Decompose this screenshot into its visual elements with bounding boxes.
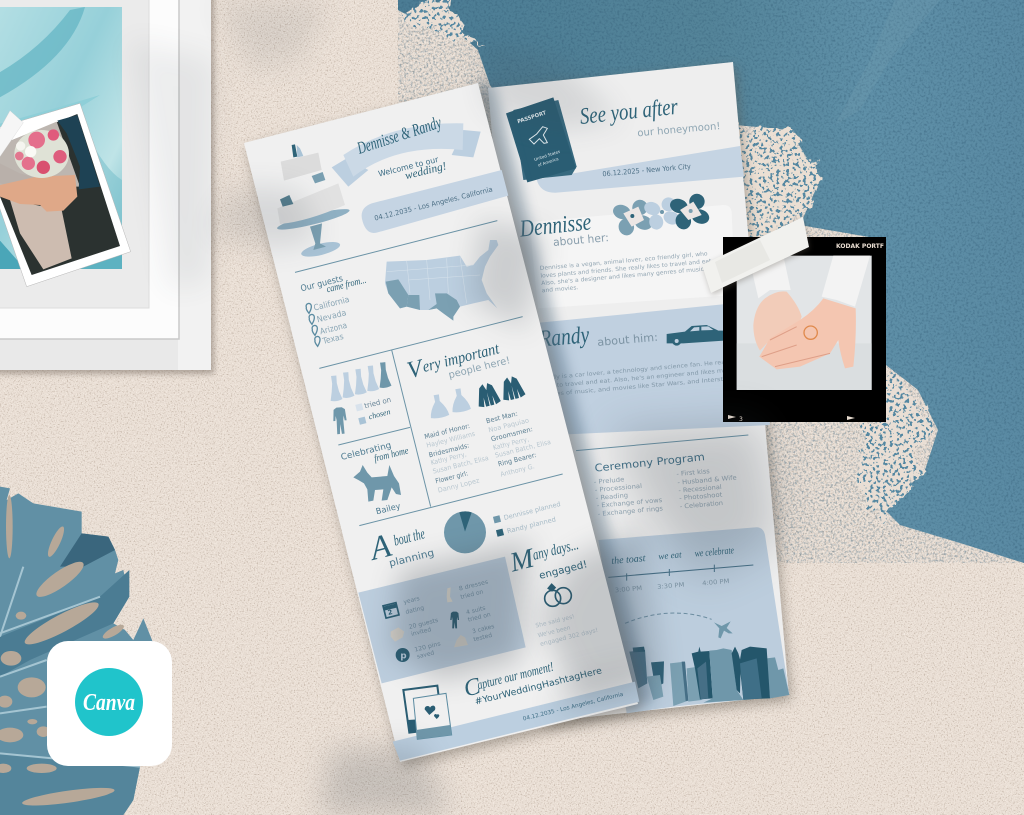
- plant shadow overlay: [130, 0, 780, 815]
- icon: pinterest: [396, 648, 410, 662]
- heading: celebrating: [340, 441, 410, 465]
- panel: planning stats: [358, 557, 526, 683]
- paragraph: about her: [540, 251, 714, 294]
- date band: 06.12.2025 - New York City: [602, 163, 691, 178]
- heading: very important: V: [404, 355, 427, 384]
- skyline: [629, 647, 789, 706]
- left card: wedding infographic: [244, 83, 643, 767]
- list: ceremony part 1: - Processional: [595, 483, 643, 494]
- panel: planning stats: 4 suits: [465, 605, 486, 616]
- panel: planning stats: 20 guests: [408, 617, 439, 631]
- list: bridal party right: Noa Paquiao: [488, 416, 530, 434]
- list: ceremony part 1: - Exchange of rings: [598, 505, 663, 518]
- inner mat: [0, 0, 149, 308]
- heading: about the planning: bout the: [392, 525, 427, 550]
- list: ceremony part 1: [594, 476, 663, 518]
- heading: very important: [404, 340, 512, 384]
- icon: passport: of America: [537, 156, 560, 168]
- timeline: 3:30 PM: [657, 582, 685, 591]
- heading: Dennisse about her: about her:: [552, 231, 609, 249]
- paint speckles top left: [405, 0, 480, 48]
- divider: [576, 435, 748, 451]
- list: bridal party left: Flower girl:: [435, 469, 469, 485]
- timeline: 3:00 PM: [615, 585, 642, 594]
- list: guest origins: Arizona: [319, 320, 348, 336]
- icon: suit: [450, 612, 459, 628]
- paragraph: about her: Also, she's a designer and likes many genres of music: [541, 267, 704, 287]
- paragraph: about her: and movies.: [542, 285, 579, 294]
- heading: see you after: [579, 94, 721, 139]
- icon: wedding cake: [276, 144, 351, 260]
- logo circle: [75, 668, 143, 736]
- divider: [338, 427, 410, 445]
- paragraph: about him: likes to travel and eat. Also, he's an engineer and likes many: [540, 367, 736, 390]
- date pill: [362, 170, 508, 233]
- timeline: 4:00 PM: [702, 578, 730, 587]
- timeline: we celebrate: [694, 545, 735, 560]
- panel: planning stats: years: [403, 595, 420, 606]
- logo wordmark: Canva: [83, 690, 135, 716]
- timeline: the toast: [611, 553, 646, 567]
- instant film photo: [723, 237, 886, 423]
- pie legend: Randy planned: [506, 515, 557, 535]
- frame moulding: [0, 0, 211, 370]
- list: ceremony part 2: [676, 468, 737, 511]
- list: ceremony part 2: - First kiss: [676, 468, 710, 478]
- banner: couple names: Dennisse & Randy: [354, 113, 444, 158]
- paragraph: about her: Dennisse is a vegan, animal lover, eco friendly girl, who: [540, 251, 708, 272]
- film marks: [728, 415, 855, 423]
- heading: very important: people here!: [447, 355, 512, 381]
- heading: many days engaged: any days...: [531, 536, 580, 564]
- panel: planning stats: invited: [410, 626, 432, 638]
- list: guest origins: [300, 274, 368, 346]
- groom suit and key: chosen: [368, 407, 391, 421]
- icon: car: [667, 325, 733, 346]
- tape piece: [0, 111, 23, 157]
- list: bridal party right: Ring Bearer:: [497, 451, 537, 468]
- panel: planning stats: 120 pins: [414, 640, 441, 654]
- divider: [319, 317, 523, 368]
- date band: [537, 146, 744, 193]
- heading: about the planning: planning: [388, 548, 435, 570]
- gowns and jackets: [427, 374, 526, 419]
- monstera leaf: [0, 487, 167, 815]
- paragraph: about him: genres of music, and movies like Star Wars, and Interstellar: [541, 375, 739, 399]
- heading: celebrating: from home: [373, 445, 410, 465]
- list: bridal party right: Susan Batch, Elisa: [494, 438, 552, 460]
- heading: Randy about him: Randy: [537, 322, 591, 353]
- about him band: [540, 302, 770, 435]
- heading: Dennisse about her: Dennisse: [518, 209, 593, 243]
- paragraph: about her: loves plants and friends. She really likes to travel and eat.: [540, 259, 714, 280]
- photo: couple with bouquet: [0, 114, 120, 275]
- leaf holes: [0, 495, 126, 809]
- picture frame: [0, 0, 214, 374]
- list: ceremony part 2: - Recessional: [678, 484, 722, 495]
- list: guest origins: Our guests: [300, 274, 345, 294]
- list: bridal party left: Maid of Honor:: [424, 422, 471, 441]
- list: bridal party left: Kathy Perry,: [430, 450, 467, 467]
- heading: many days engaged: M: [506, 542, 539, 578]
- list: ceremony part 1: - Reading: [596, 492, 628, 502]
- heading: about the planning: A: [364, 527, 395, 568]
- bottom band: 04.12.2035 - Los Angeles, California: [522, 692, 624, 723]
- list: guest origins: Nevada: [316, 307, 347, 324]
- icon: dog: [353, 465, 401, 502]
- text: capture moment and hashtag: C: [461, 673, 484, 702]
- film label: KODAK PORTF: [836, 242, 884, 250]
- heading: celebrating: Celebrating: [340, 441, 393, 463]
- text: capture moment and hashtag: apture our moment!: [475, 659, 555, 692]
- heading: Randy about him: about him:: [597, 331, 658, 349]
- icon: passport: [506, 97, 577, 182]
- pie legend: [493, 500, 561, 537]
- icon: guests heart: [391, 627, 404, 642]
- divider: [359, 474, 563, 526]
- list: bridal party right: Kathy Perry,: [492, 435, 530, 452]
- text: capture moment and hashtag: #YourWeddingHashtagHere: [474, 666, 604, 708]
- text: Bailey: Bailey: [375, 501, 401, 516]
- heading: about the planning: [364, 525, 435, 570]
- list: bridal party left: Danny Lopez: [437, 476, 481, 495]
- pie legend: Dennisse planned: [503, 500, 561, 522]
- blue paint brush stroke: [398, 0, 1024, 563]
- badge: Canva app icon: [47, 641, 172, 766]
- icon: pinterest: p: [400, 651, 407, 661]
- list: guest origins: California: [312, 294, 350, 313]
- list: guest origins: Texas: [320, 331, 345, 346]
- icon: airplane: [714, 621, 733, 638]
- icon: calendar: [383, 603, 399, 618]
- panel: planning stats: 8 dresses: [458, 579, 489, 593]
- icon: cake: [454, 635, 468, 647]
- text: engaged days: She said yes!: [535, 613, 575, 630]
- list: bridal party right: Groomsmen:: [490, 425, 534, 443]
- marble art print: [0, 7, 122, 269]
- heading: Randy about him: [537, 322, 658, 353]
- timeline: we eat: [658, 549, 682, 561]
- list: ceremony part 1: - Prelude: [594, 476, 625, 486]
- tilted photo print: [0, 103, 131, 287]
- list: ceremony part 2: - Husband & Wife: [677, 475, 737, 487]
- icon: flowers: [609, 190, 713, 238]
- bridesmaid dresses: [328, 362, 392, 402]
- heading: many days engaged: engaged!: [538, 559, 589, 582]
- paragraph: about him: [540, 359, 739, 399]
- list: ceremony part 2: - Photoshoot: [679, 492, 723, 502]
- icon: passport: United States: [533, 149, 561, 162]
- icon: passport: PASSPORT: [517, 110, 547, 125]
- icon: photo frames: [403, 686, 452, 739]
- pie chart: [444, 511, 486, 553]
- right card: honeymoon page: [488, 62, 791, 727]
- panel: planning stats: tried on: [467, 611, 492, 624]
- flight path: [625, 613, 712, 623]
- text: welcome: wedding!: [404, 160, 448, 182]
- date pill: 04.12.2035 - Los Angeles, California: [374, 185, 494, 223]
- list: bridal party left: Hayley Williams: [426, 430, 476, 450]
- panel: timeline and skyline: [598, 527, 789, 713]
- icon: calendar: 2: [387, 608, 394, 617]
- paint speckles lower: [858, 362, 935, 525]
- banner: couple names: [332, 113, 481, 187]
- text: engaged days: We've been: [537, 624, 571, 639]
- list: bridal party left: [424, 422, 489, 495]
- list: ceremony part 1: - Exchange of vows: [597, 497, 663, 510]
- film marks: 3: [739, 416, 743, 423]
- list: bridal party left: Bridesmaids:: [428, 441, 470, 459]
- heading: very important: ery important: [421, 340, 501, 376]
- panel: planning stats: dating: [405, 604, 425, 616]
- icon: dress: [447, 587, 453, 602]
- paragraph: about him: Randy is a car lover, a technology and science fan. He really: [540, 359, 733, 382]
- heading: many days engaged: [506, 536, 589, 582]
- paint speckles upper: [735, 128, 822, 260]
- panel: planning stats: tried on: [460, 588, 484, 601]
- panel: planning stats: saved: [416, 649, 435, 661]
- heading: ceremony program: Ceremony Program: [594, 451, 705, 475]
- bottom band: [393, 682, 639, 761]
- US map: [385, 240, 498, 321]
- icon: rings: [545, 584, 571, 606]
- heading: see you after: our honeymoon!: [637, 121, 721, 139]
- timeline: [608, 545, 753, 594]
- vertical divider: [392, 350, 431, 507]
- list: bridal party left: Susan Batch, Elisa: [432, 454, 489, 476]
- about her panel: [530, 205, 735, 308]
- list: bridal party right: Anthony G.: [500, 462, 535, 479]
- heading: see you after: See you after: [579, 94, 680, 130]
- panel: planning stats: tested: [473, 632, 493, 643]
- groom suit and key: tried on: [363, 395, 392, 410]
- list: guest origins: came from...: [325, 275, 368, 295]
- panel: planning stats: 3 cakes: [471, 623, 495, 635]
- divider: [295, 221, 497, 272]
- photo: hands holding rings: [737, 256, 872, 390]
- text: engaged days: [535, 613, 599, 648]
- list: bridal party right: Best Man:: [485, 410, 519, 425]
- list: bridal party right: [485, 410, 552, 479]
- tape: [702, 217, 810, 295]
- list: ceremony part 2: - Celebration: [680, 500, 723, 511]
- text: engaged days: engaged 302 days!: [539, 627, 599, 648]
- groom suit and key: [332, 395, 392, 434]
- text: welcome: Welcome to our: [377, 155, 440, 179]
